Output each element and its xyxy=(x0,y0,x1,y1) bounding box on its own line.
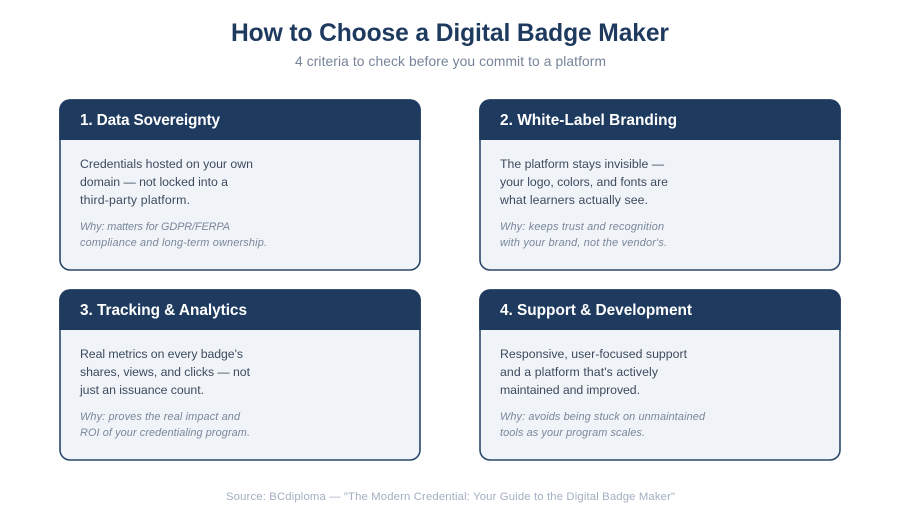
body text: support and development: maintained and improved. xyxy=(500,383,640,397)
source note: Source: BCdiploma — "The Modern Credential: Your Guide to the Digital Badge Maker" xyxy=(226,491,675,503)
body text: data sovereignty: third-party platform. xyxy=(80,193,190,207)
panel: data sovereignty xyxy=(59,99,421,270)
body text: white-label branding: The platform stays invisible — xyxy=(500,157,665,171)
why note: white-label branding: Why: keeps trust and recognition xyxy=(500,221,664,233)
body text: data sovereignty: Credentials hosted on your own xyxy=(80,157,253,171)
why note: data sovereignty xyxy=(80,221,267,249)
title: How to Choose a Digital Badge Maker xyxy=(231,20,669,47)
body text: tracking and analytics: shares, views, and clicks — not xyxy=(80,365,251,379)
why note: white-label branding xyxy=(500,221,667,249)
why note: white-label branding: with your brand, not the vendor's. xyxy=(500,237,667,249)
body text: data sovereignty xyxy=(80,157,253,207)
body text: white-label branding xyxy=(499,157,668,207)
heading: white-label branding: 2. White-Label Branding xyxy=(500,112,677,129)
body text: white-label branding: your logo, colors, and fonts are xyxy=(500,175,668,189)
body text: data sovereignty: domain — not locked into a xyxy=(80,175,228,189)
heading: data sovereignty: 1. Data Sovereignty xyxy=(80,112,220,129)
heading: tracking and analytics: 3. Tracking & Analytics xyxy=(80,302,247,319)
why note: tracking and analytics: ROI of your credentialing program. xyxy=(80,427,250,439)
body text: support and development: Responsive, user-focused support xyxy=(500,347,688,361)
why note: tracking and analytics: Why: proves the real impact and xyxy=(80,411,241,423)
body text: tracking and analytics: just an issuance count. xyxy=(79,383,204,397)
body text: support and development xyxy=(500,347,688,397)
body text: support and development: and a platform that's actively xyxy=(500,365,659,379)
why note: data sovereignty: compliance and long-term ownership. xyxy=(80,237,267,249)
heading: support and development: 4. Support & Development xyxy=(500,302,692,319)
why note: data sovereignty: Why: matters for GDPR/FERPA xyxy=(80,221,230,233)
body text: tracking and analytics xyxy=(79,347,251,397)
subtitle: 4 criteria to check before you commit to a platform xyxy=(295,54,606,69)
body text: white-label branding: what learners actually see. xyxy=(499,193,648,207)
panel: support and development xyxy=(479,289,841,460)
why note: tracking and analytics xyxy=(80,411,250,439)
why note: support and development: tools as your program scales. xyxy=(500,427,645,439)
why note: support and development xyxy=(500,411,706,439)
body text: tracking and analytics: Real metrics on every badge's xyxy=(80,347,243,361)
panel: tracking and analytics xyxy=(59,289,421,460)
why note: support and development: Why: avoids being stuck on unmaintained xyxy=(500,411,706,423)
panel: white-label branding xyxy=(479,99,841,270)
